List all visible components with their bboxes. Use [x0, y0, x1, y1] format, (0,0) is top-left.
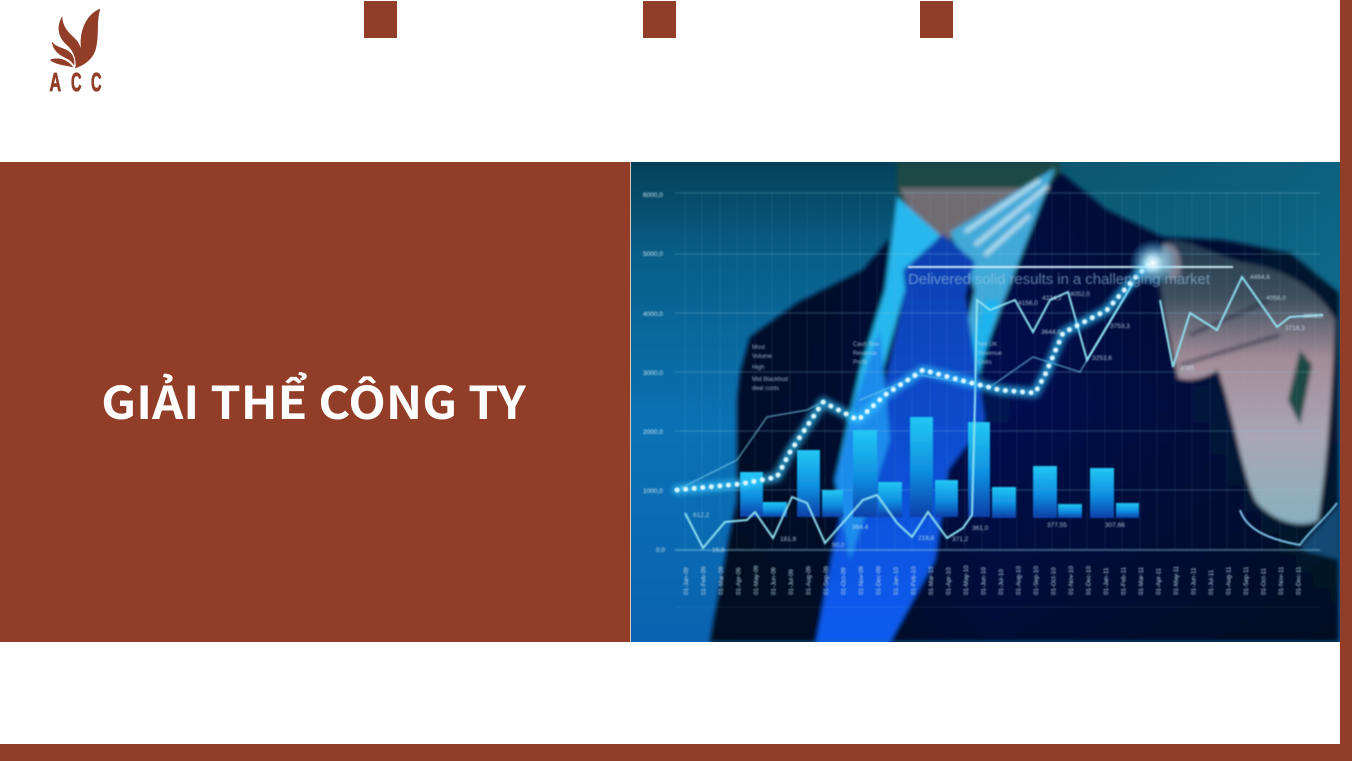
icon: ACC logo	[50, 8, 102, 97]
chart axis labels: 5000,0	[643, 251, 663, 258]
date axis labels: 01-Sep-10	[1033, 566, 1040, 595]
data value labels: 3644,0	[1041, 329, 1061, 336]
data value labels: 4234,2	[1042, 295, 1062, 302]
date axis labels: 01-Sep-11	[1243, 566, 1250, 595]
figure: suit, shirt, tie, hand	[710, 162, 1339, 642]
date axis labels: 01-May-10	[963, 565, 970, 595]
bottom border bar	[0, 744, 1352, 761]
photo background	[630, 162, 1340, 642]
chart axis labels	[643, 192, 665, 554]
chart legend: High	[752, 365, 764, 371]
date axis labels: 01-May-09	[753, 565, 760, 595]
date axis labels: 01-Jan-11	[1103, 567, 1110, 595]
data value labels	[693, 274, 1323, 554]
chart axis labels: 0,0	[656, 547, 665, 554]
date axis labels: 01-Sep-09	[823, 566, 830, 595]
glowing fingertip flare	[1129, 239, 1177, 287]
date axis labels: 01-Jan-09	[683, 567, 690, 595]
data value labels: 181,8	[780, 536, 797, 543]
date axis labels: 01-Oct-11	[1260, 567, 1268, 595]
data value labels: 3716,3	[1285, 325, 1305, 332]
date axis labels: 01-Dec-11	[1296, 566, 1302, 595]
date axis labels: 01-Apr-09	[736, 567, 742, 595]
chart legend: Volume	[752, 354, 773, 360]
data value labels: 364,4	[852, 524, 869, 531]
top square marker 1	[364, 1, 397, 38]
logo wordmark: C	[71, 69, 82, 97]
logo wordmark	[50, 67, 102, 97]
chart axis labels: 2000,0	[643, 429, 663, 436]
date axis labels: 01-Nov-10	[1068, 566, 1075, 595]
data value labels: 16,8	[712, 547, 725, 554]
date axis labels: 01-Aug-11	[1226, 566, 1232, 595]
data value labels: 612,2	[693, 512, 710, 519]
chart axis labels: 6000,0	[643, 192, 663, 199]
data value labels: 50,0	[832, 542, 845, 549]
panel: title background	[0, 162, 630, 642]
chart legend: Revenue	[853, 351, 878, 357]
data value labels: 4056,0	[1266, 295, 1286, 302]
date axis labels: 01-Jul-09	[788, 569, 795, 595]
chart axis labels: 1000,0	[643, 488, 663, 495]
chart headline: Delivered solid results in a challenging market	[908, 271, 1211, 288]
chart grid	[675, 193, 1320, 607]
chart legend	[752, 342, 1003, 392]
logo wordmark: A	[50, 67, 61, 97]
chart legend: Net UK	[978, 342, 997, 348]
chart axis labels: 3000,0	[643, 370, 663, 377]
logo wordmark: C	[91, 69, 102, 97]
date axis labels: 01-Nov-09	[858, 566, 865, 595]
date axis labels: 01-Mar-10	[928, 566, 935, 595]
data value labels: 307,66	[1105, 522, 1125, 529]
data value labels: 4156,0	[1018, 300, 1038, 307]
chart legend: Units	[978, 360, 992, 366]
date axis labels: 01-Oct-09	[840, 567, 848, 595]
line chart: lower zigzag	[685, 277, 1323, 548]
chart legend: Mid Blackbud	[752, 377, 788, 383]
date axis labels	[683, 565, 1302, 595]
date axis labels: 01-Mar-11	[1138, 566, 1145, 595]
cuff line	[1240, 503, 1337, 545]
chart legend: Cash flow	[853, 342, 880, 348]
date axis labels: 01-Mar-09	[718, 566, 725, 595]
data value labels: 3753,3	[1110, 323, 1130, 330]
date axis labels: 01-Feb-11	[1120, 566, 1128, 595]
date axis labels: 01-Dec-10	[1086, 566, 1092, 595]
date axis labels: 01-Aug-10	[1016, 566, 1022, 595]
title: GIẢI THỂ CÔNG TY	[101, 367, 526, 432]
date axis labels: 01-Apr-11	[1156, 567, 1162, 595]
chart axis labels: 4000,0	[643, 311, 663, 318]
data value labels: 3253,6	[1092, 355, 1112, 362]
data value labels: 377,55	[1047, 522, 1067, 529]
line chart: thin trend	[677, 283, 1133, 490]
date axis labels: 01-May-11	[1173, 565, 1180, 595]
date axis labels: 01-Jun-11	[1190, 567, 1198, 595]
top square marker 2	[643, 1, 676, 38]
date axis labels: 01-Aug-09	[806, 566, 812, 595]
line chart: glowing dotted trend	[677, 263, 1150, 490]
date axis labels: 01-Apr-10	[946, 567, 952, 595]
chart legend: deal costs	[752, 386, 779, 392]
date axis labels: 01-Dec-09	[876, 566, 882, 595]
data value labels: 361,0	[972, 525, 989, 532]
date axis labels: 01-Jan-10	[893, 567, 900, 595]
date axis labels: 01-Nov-11	[1278, 566, 1285, 595]
date axis labels: 01-Feb-09	[700, 566, 708, 595]
date axis labels: 01-Jul-10	[998, 569, 1005, 595]
data value labels: 371,2	[952, 536, 969, 543]
data value labels: 3085	[1180, 365, 1195, 372]
image: businessman drawing a glowing chart	[630, 162, 1340, 642]
top square marker 3	[920, 1, 953, 38]
date axis labels: 01-Oct-10	[1050, 567, 1058, 595]
data value labels: 3958,0	[1303, 313, 1323, 320]
data value labels: 4464,6	[1250, 274, 1270, 281]
right border bar	[1340, 0, 1352, 761]
date axis labels: 01-Jun-09	[770, 567, 778, 595]
date axis labels: 01-Feb-10	[910, 566, 918, 595]
chart legend: Most	[752, 345, 765, 351]
chart legend: Profit	[853, 360, 867, 366]
date axis labels: 01-Jul-11	[1208, 569, 1215, 595]
bar chart	[740, 417, 1139, 518]
chart legend: Revenue	[978, 351, 1003, 357]
data value labels: 218,8	[918, 535, 935, 542]
data value labels: 4052,0	[1070, 291, 1090, 298]
date axis labels: 01-Jun-10	[980, 567, 988, 595]
